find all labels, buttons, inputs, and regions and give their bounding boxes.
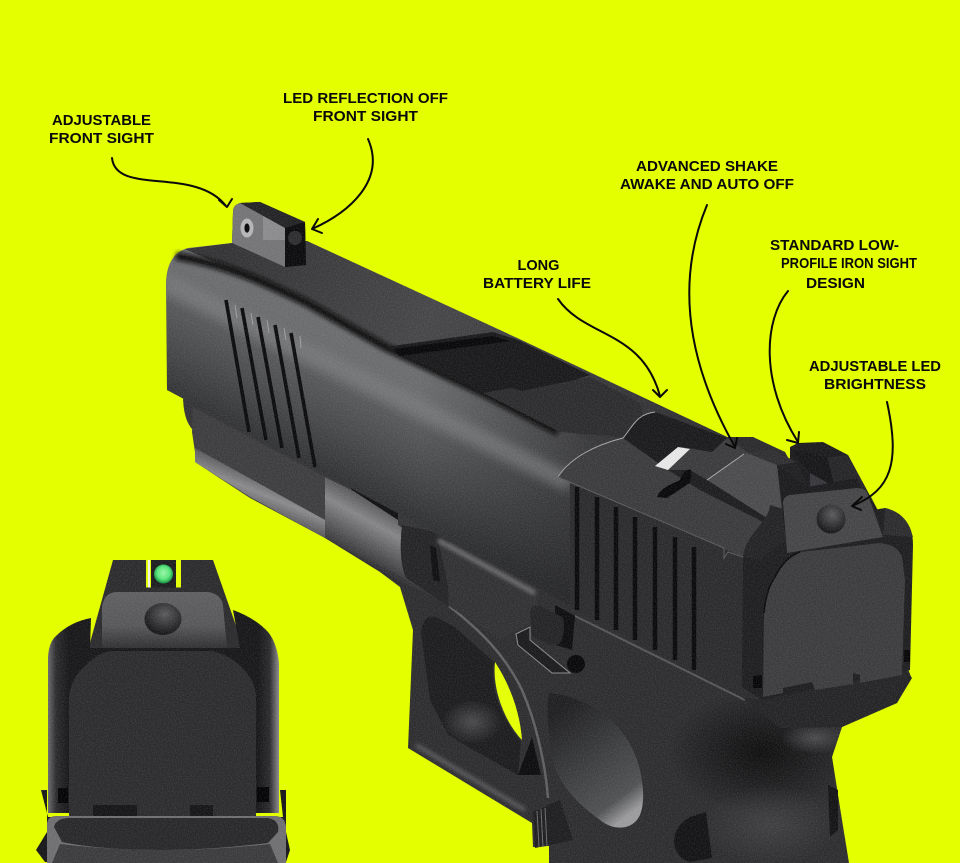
- rear edge notch: [558, 477, 743, 558]
- LED window: [146, 560, 181, 588]
- callout: shake awake: ADVANCED SHAKE: [636, 158, 778, 175]
- rear chamfer and ejection port: [558, 412, 778, 557]
- inset slide body: [48, 610, 279, 813]
- serration highlights: [235, 305, 301, 348]
- barrel and dust cover: [175, 375, 538, 640]
- arrow to sight ears: [770, 291, 799, 443]
- sight screw: [288, 231, 302, 245]
- callout: LED brightness: BRIGHTNESS: [824, 376, 926, 393]
- pistol frame and grip: [325, 530, 912, 863]
- extractor slot: [657, 469, 691, 498]
- trigger guard opening: [416, 606, 548, 810]
- magazine release: [674, 785, 838, 862]
- arrow to battery area: [558, 299, 667, 397]
- arrow to sight body: [689, 205, 737, 448]
- inset cover plate: [69, 651, 256, 816]
- callout: adjustable front sight: [49, 112, 232, 207]
- inset: rear sight view with LED: [36, 560, 290, 863]
- callout: iron sight design: PROFILE IRON SIGHT: [781, 255, 917, 272]
- beavertail: [742, 668, 912, 728]
- thumb rest: [547, 693, 643, 828]
- trigger: [518, 737, 541, 775]
- callout: iron sight design: DESIGN: [806, 275, 865, 292]
- near sight ear: [747, 450, 808, 500]
- rear side darkening: [570, 483, 762, 700]
- slide stop and lever: [516, 605, 585, 673]
- callout: iron sight design: STANDARD LOW-: [770, 237, 899, 254]
- sight body: [777, 465, 883, 553]
- trigger safety lever: [533, 800, 573, 848]
- callout: adjustable front sight: FRONT SIGHT: [49, 130, 154, 147]
- rear slide serrations: [577, 487, 694, 670]
- inset lower frame: [36, 790, 290, 863]
- inset sight plate: [102, 592, 227, 648]
- rear button: [816, 504, 846, 534]
- callout: battery life: BATTERY LIFE: [483, 275, 591, 292]
- top edge shadow band: [176, 256, 558, 432]
- front sight: [232, 202, 306, 267]
- extractor highlight: [655, 447, 690, 470]
- slide body: [166, 241, 790, 690]
- callout: battery life: [483, 257, 667, 397]
- callout: shake awake: AWAKE AND AUTO OFF: [620, 176, 794, 193]
- main pistol illustration: [165, 202, 913, 863]
- rear face: [742, 465, 913, 700]
- optic cut: [385, 332, 590, 393]
- wedge highlight: [707, 454, 744, 480]
- arrow to sight block: [312, 139, 373, 233]
- slide top face: [185, 241, 727, 470]
- callout: battery life: LONG: [518, 257, 560, 274]
- callout: iron sight design: [770, 237, 917, 443]
- rear sight wedge: [707, 453, 785, 525]
- callout: LED reflection: FRONT SIGHT: [313, 108, 418, 125]
- callout: LED brightness: [809, 358, 941, 510]
- callout: LED reflection: LED REFLECTION OFF: [283, 90, 448, 107]
- inset plate notches: [93, 805, 213, 816]
- front slide serrations: [226, 300, 315, 467]
- arrow to button: [852, 402, 893, 510]
- arrow to front sight: [112, 158, 232, 207]
- callout: adjustable front sight: ADJUSTABLE: [52, 112, 151, 129]
- callout: LED brightness: ADJUSTABLE LED: [809, 358, 941, 375]
- inset rear sight: [88, 560, 240, 650]
- cover plate gaps: [753, 650, 910, 688]
- inset LED button: [144, 603, 182, 635]
- far sight ear: [790, 442, 883, 520]
- rear cover plate: [763, 543, 905, 697]
- callout: LED reflection: [283, 90, 448, 233]
- callout: shake awake: [620, 158, 794, 448]
- white dot: [240, 218, 254, 238]
- rear sight plate: [783, 488, 883, 553]
